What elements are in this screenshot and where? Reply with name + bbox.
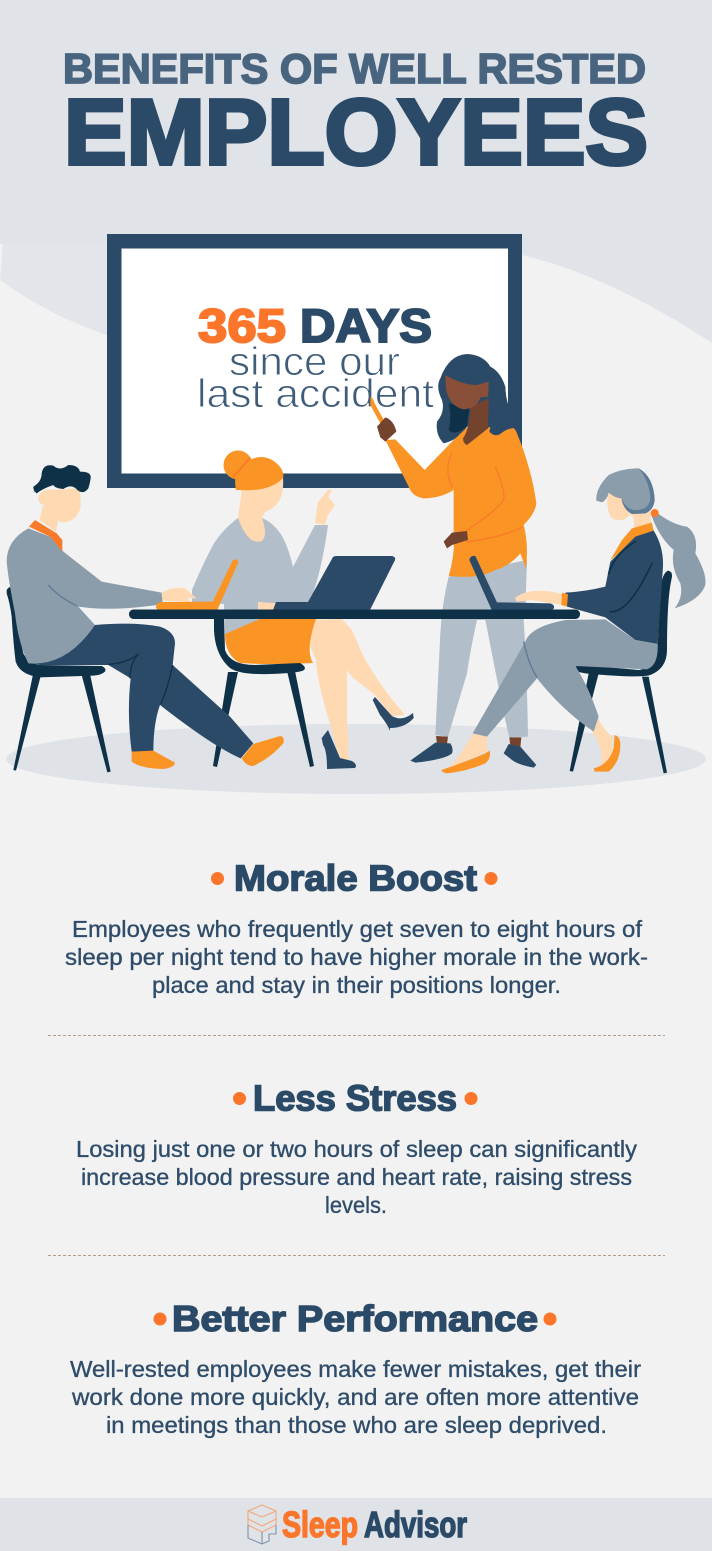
presenter hands and marker: [370, 397, 468, 548]
logo wordmark: Advisor: [364, 1504, 467, 1545]
neck and face: [607, 490, 651, 531]
title: BENEFITS OF WELL RESTED: [63, 45, 646, 92]
figure: presenter: [370, 354, 536, 768]
less stress text: increase blood pressure and heart rate, raising stress: [81, 1164, 632, 1190]
laptop dark: [273, 556, 395, 610]
hair: [33, 465, 91, 493]
collar: [610, 523, 654, 560]
less stress text: levels.: [325, 1192, 387, 1218]
better performance text: Well-rested employees make fewer mistakes, get their: [70, 1356, 641, 1382]
morale boost text: [65, 916, 648, 998]
hair tie: [651, 509, 659, 517]
laptop navy: [469, 556, 554, 611]
better performance text: work done more quickly, and are often more attentive: [71, 1384, 639, 1410]
ponytail: [651, 514, 706, 608]
header band: [0, 0, 712, 244]
presenter ankles and shoes: [410, 736, 536, 768]
whiteboard headline: DAYS: [300, 299, 432, 352]
hair and bun: [224, 450, 283, 490]
chair: [7, 586, 111, 772]
trouser creases: [108, 654, 173, 704]
figure: woman in orange skirt: [192, 450, 414, 769]
top: [565, 531, 663, 644]
presenter front hair lobe: [489, 386, 518, 435]
trousers: [473, 619, 658, 737]
trousers: [33, 624, 253, 758]
footer band: [0, 1498, 712, 1551]
sweater: [7, 528, 163, 664]
morale boost text: place and stay in their positions longer.: [152, 972, 561, 998]
logo wordmark: [282, 1504, 467, 1545]
chair: [570, 571, 672, 773]
presenter neck and face: [445, 375, 489, 445]
morale boost text: Employees who frequently get seven to eight hours of: [72, 916, 643, 942]
hand on table: [258, 602, 289, 610]
section: morale boost: [65, 858, 648, 998]
background swoosh right: [522, 244, 712, 343]
collar: [29, 520, 62, 552]
figure: woman with ponytail: [441, 468, 706, 773]
grey hair: [596, 468, 655, 514]
raised hand: [315, 490, 335, 525]
conference table: [129, 610, 580, 619]
section: less stress: [76, 1078, 638, 1218]
floor shadow: [6, 724, 706, 794]
whiteboard headline: 365: [198, 299, 286, 352]
background swoosh left: [0, 244, 107, 335]
morale boost heading: Morale Boost: [234, 858, 477, 898]
neck and head: [38, 488, 81, 532]
logo wordmark: Sleep: [282, 1504, 358, 1545]
presenter sweater: [385, 426, 536, 577]
whiteboard subtext: last accident: [197, 372, 434, 416]
footer logo: [248, 1504, 467, 1545]
whiteboard headline: [198, 299, 432, 352]
section: better performance: [70, 1298, 641, 1438]
top creases: [609, 542, 652, 612]
presenter sweater folds: [448, 453, 522, 542]
less stress text: [76, 1136, 638, 1218]
less stress heading: Less Stress: [253, 1078, 457, 1118]
hand and cuff: [515, 591, 568, 607]
hand: [162, 588, 197, 602]
crossed leg and heel: [308, 619, 414, 769]
shoes: [132, 736, 284, 769]
lower legs and flats: [441, 717, 620, 773]
presenter back hair: [437, 354, 518, 443]
figure: man in grey sweater: [7, 465, 284, 772]
chair: [213, 618, 314, 767]
whiteboard subtext: [197, 340, 434, 416]
whiteboard: [107, 234, 522, 488]
icon: sleep advisor mattress: [248, 1505, 276, 1544]
laptop orange: [156, 559, 239, 611]
less stress text: Losing just one or two hours of sleep can significantly: [76, 1136, 638, 1162]
better performance text: [70, 1356, 641, 1438]
skirt: [225, 619, 316, 664]
better performance heading: Better Performance: [172, 1298, 538, 1339]
better performance text: in meetings than those who are sleep deprived.: [106, 1412, 607, 1438]
sweater: [192, 518, 328, 635]
title: EMPLOYEES: [64, 80, 648, 184]
morale boost text: sleep per night tend to have higher morale in the work-: [65, 944, 648, 970]
whiteboard subtext: since our: [229, 340, 400, 384]
presenter trousers: [435, 560, 528, 737]
neck and face: [238, 478, 283, 542]
